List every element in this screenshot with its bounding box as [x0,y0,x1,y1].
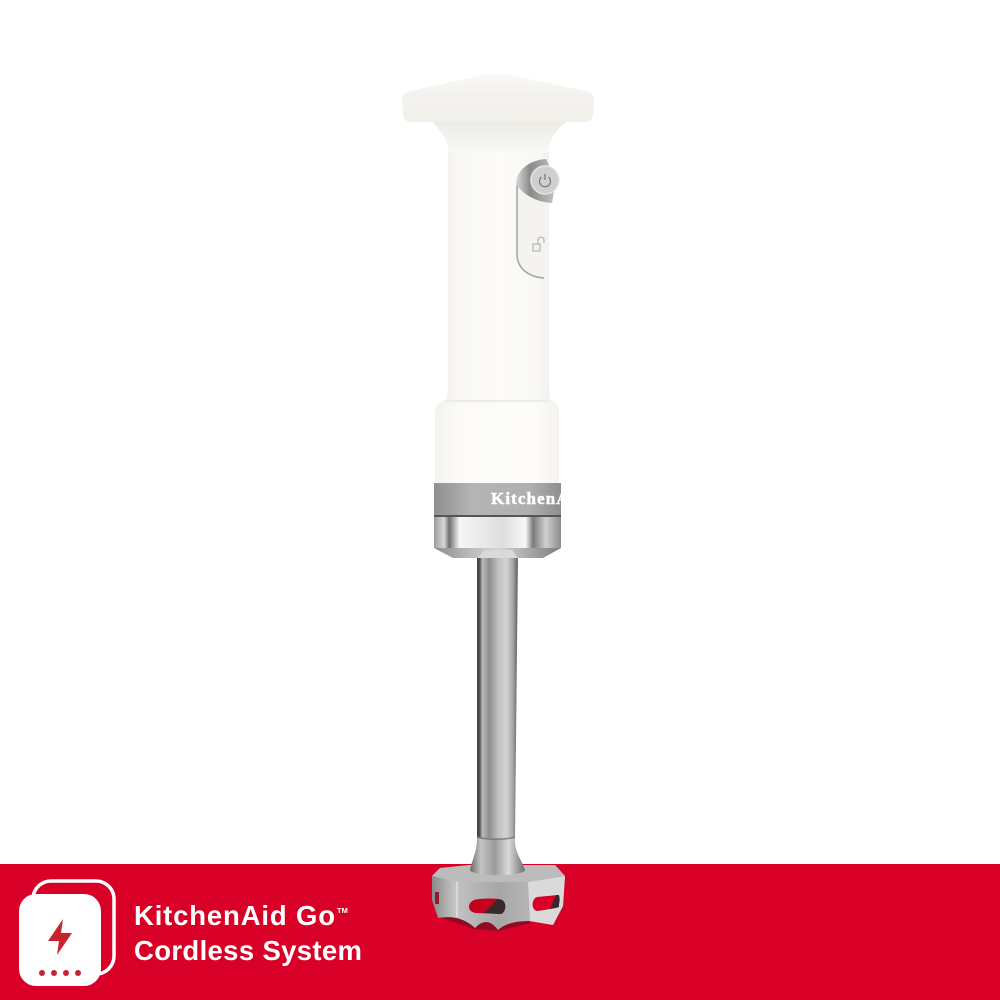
knob face [531,166,559,194]
guard inner shadow [439,905,530,931]
icon: unlock [533,237,544,251]
icon: power [540,174,550,187]
handle body [446,150,550,404]
red banner [0,864,1000,1000]
metal band [434,483,561,516]
power knob [516,159,559,203]
icon: front battery body [19,894,101,986]
switch slide panel [517,185,548,279]
trademark: TM [337,906,348,915]
switch slot outline [517,185,544,278]
icon: lightning bolt [48,919,72,955]
label line one: KitchenAid Go [134,900,335,931]
guard window front [469,898,505,914]
guard front panel edge [456,882,458,917]
ring chamfer [434,548,561,558]
handle neck flare [432,122,566,152]
band groove [434,515,561,518]
label line two: Cordless System [134,935,362,966]
brand wordmark: KitchenAid [491,489,586,508]
chrome ring [434,517,561,548]
neck highlight [478,550,518,558]
guard top face [432,865,565,882]
icon: battery pack [19,881,114,986]
guard window left [435,892,439,904]
motor collar [435,400,559,483]
banner label [134,900,362,966]
hand blender [402,74,594,931]
guard right panel [528,876,565,925]
guard body [432,865,565,930]
collar shoulder shadow [438,400,557,405]
blade guard [432,837,565,931]
flare collar line [477,837,515,839]
icon: back battery outline [33,881,114,974]
shaft flare [470,838,525,875]
blender shaft [477,552,518,838]
head cap plate [402,74,594,122]
knob side [516,159,556,203]
icon: charge dots [39,970,81,976]
guard window right [533,895,560,911]
